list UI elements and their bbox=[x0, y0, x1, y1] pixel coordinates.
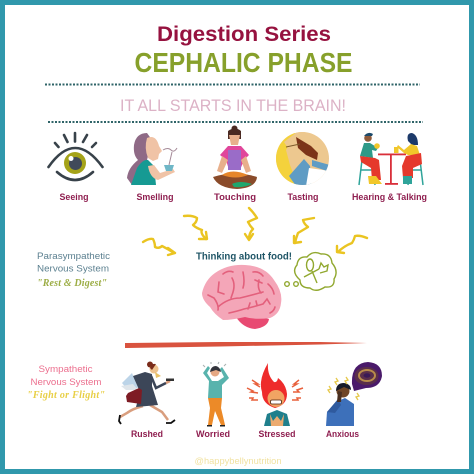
arrows: yellow squiggles bbox=[143, 208, 367, 255]
label: Stressed: Stressed bbox=[258, 429, 296, 440]
icon: worried person bbox=[203, 362, 229, 426]
icon: hearing and talking couple bbox=[359, 133, 423, 185]
icon: touching cook bbox=[213, 126, 257, 189]
label: Rushed: Rushed bbox=[131, 429, 163, 440]
label: Sympathetic system bbox=[27, 364, 105, 401]
dotted rule: bottom bbox=[48, 121, 423, 123]
label: Touching: Touching bbox=[214, 192, 256, 203]
label: Anxious: Anxious bbox=[326, 429, 359, 440]
label: Parasympathetic system: "Rest & Digest" bbox=[37, 278, 107, 289]
label: Parasympathetic system: Nervous System bbox=[37, 264, 109, 274]
subtitle: IT ALL STARTS IN THE BRAIN! bbox=[120, 96, 346, 115]
label: Parasympathetic system: Parasympathetic bbox=[37, 251, 110, 262]
label: Parasympathetic system bbox=[37, 251, 110, 289]
divider: red brush stroke bbox=[125, 342, 367, 348]
icon: stressed flaming head bbox=[247, 363, 303, 426]
icon: thought bubble with spoon and fork bbox=[285, 253, 336, 290]
icon: brain bbox=[202, 265, 281, 329]
footer handle: @happybellynutrition bbox=[194, 456, 282, 467]
icon: rushed woman bbox=[119, 362, 175, 424]
icon: tasting circle bbox=[276, 132, 330, 186]
label: Seeing: Seeing bbox=[60, 192, 89, 203]
label: Sympathetic system: "Fight or Flight" bbox=[27, 390, 105, 401]
dotted rule: top bbox=[45, 84, 420, 86]
label: Hearing and Talking: Hearing & Talking bbox=[352, 192, 427, 203]
icon: eye bbox=[48, 133, 102, 180]
icon: smelling woman bbox=[127, 133, 177, 185]
heading: Thinking about food: Thinking about food! bbox=[196, 250, 292, 262]
heading: Cephalic Phase: CEPHALIC PHASE bbox=[134, 47, 352, 78]
label: Tasting: Tasting bbox=[288, 192, 319, 203]
title: Digestion Series: Digestion Series bbox=[157, 22, 331, 46]
label: Sympathetic system: Nervous System bbox=[30, 377, 102, 388]
icon: anxious person with speech bubble bbox=[326, 362, 382, 426]
label: Smelling: Smelling bbox=[136, 192, 174, 203]
label: Sympathetic system: Sympathetic bbox=[38, 364, 93, 375]
label: Worried: Worried bbox=[196, 429, 230, 440]
